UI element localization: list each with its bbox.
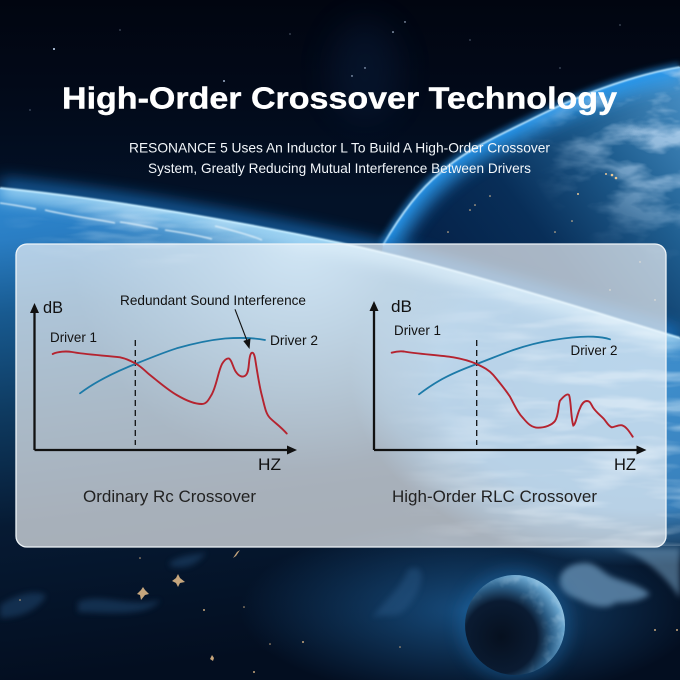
background: right planet <box>382 67 680 338</box>
background: cloud wisps lower left <box>0 552 206 618</box>
chart labels <box>43 292 318 506</box>
background: milky way haze <box>330 20 400 120</box>
title: High-Order Crossover Technology <box>62 80 618 116</box>
subtitle: System, Greatly Reducing Mutual Interference Between Drivers <box>148 160 531 176</box>
background: right planet city lights <box>447 173 656 301</box>
background: city lights <box>19 550 678 673</box>
background: right planet limb glow <box>383 67 680 245</box>
subtitle <box>129 140 550 176</box>
background: big planet body <box>0 188 680 564</box>
chart labels: Driver 1 <box>50 330 97 345</box>
background: big planet glow above limb <box>0 186 680 336</box>
crossover marker <box>134 340 136 445</box>
chart: high-order RLC crossover <box>370 297 646 506</box>
background: stars <box>30 21 620 150</box>
panel: frosted card <box>16 244 666 547</box>
crossover marker <box>476 340 478 445</box>
driver 1 curve <box>392 351 633 437</box>
background: big planet limb <box>0 188 680 338</box>
background: right planet limb <box>383 67 680 245</box>
chart labels: High-Order RLC Crossover <box>392 487 597 506</box>
y axis and x axis <box>370 301 646 454</box>
chart labels: Driver 2 <box>570 343 618 358</box>
chart labels: HZ <box>258 455 281 474</box>
background: clouds at lower right corner <box>612 548 680 598</box>
callout arrow <box>235 309 250 349</box>
background: cloud on lower right <box>560 563 650 607</box>
chart labels: Redundant Sound Interference <box>120 292 306 308</box>
small planet <box>459 569 571 680</box>
y axis and x axis <box>30 303 297 454</box>
background: cloud wisps lower centre <box>372 568 422 618</box>
chart labels: Ordinary Rc Crossover <box>83 487 256 506</box>
driver 2 curve <box>419 337 610 394</box>
chart: ordinary RC crossover <box>30 292 318 506</box>
chart labels: dB <box>43 298 63 317</box>
chart labels: dB <box>391 297 412 316</box>
chart labels: HZ <box>614 455 636 474</box>
background: lower deep-blue glow <box>240 520 680 680</box>
subtitle: RESONANCE 5 Uses An Inductor L To Build A High-Order Crossover <box>129 140 550 156</box>
driver 1 curve <box>53 352 287 434</box>
chart labels: Driver 1 <box>394 323 441 338</box>
chart labels <box>391 297 636 506</box>
driver 2 curve <box>80 338 265 393</box>
chart labels: Driver 2 <box>270 333 318 348</box>
